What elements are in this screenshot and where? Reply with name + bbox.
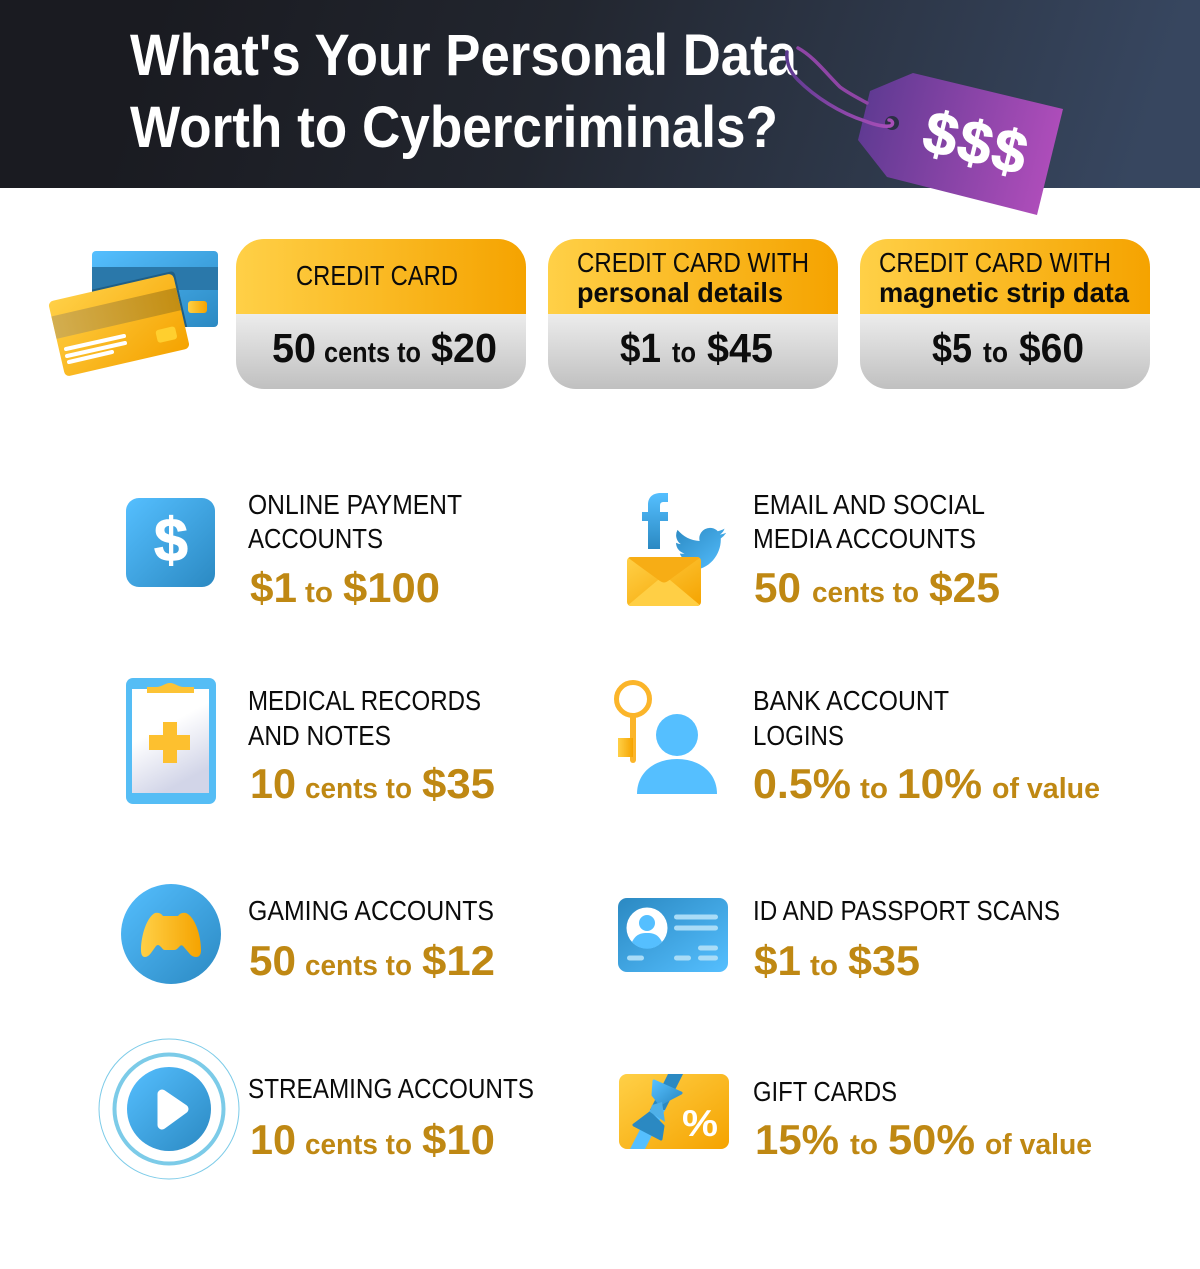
bank account logins: 0.5% [753,760,851,807]
icon: credit cards [48,251,218,377]
id and passport scans: ID AND PASSPORT SCANS [753,895,1060,926]
gift cards: to [850,1129,878,1161]
panel: credit card with personal details price: $45 [707,325,773,371]
icon: id card [618,898,728,972]
medical records and notes: $35 [422,760,495,807]
tag text: $$$ [917,98,1034,188]
email and social media accounts [753,489,1000,611]
email and social media accounts: 50 [754,564,801,611]
gift cards: GIFT CARDS [753,1076,897,1107]
panel: credit card with magnetic strip data price: CREDIT CARD WITH [879,247,1111,278]
medical records and notes [248,685,495,807]
gaming accounts: $12 [422,937,495,984]
streaming accounts: cents to [305,1129,412,1161]
icon: social and email [627,493,726,606]
icon: streaming play button [99,1039,239,1179]
icon: key and person [616,682,717,794]
icon: medical clipboard [126,678,216,804]
email and social media accounts: EMAIL AND SOCIAL [753,489,985,520]
panel: credit card with personal details price: $1 [620,325,661,371]
panel: credit card price: CREDIT CARD [296,260,458,291]
panel: credit card with personal details price: CREDIT CARD WITH [577,247,809,278]
medical records and notes: 10 [250,760,296,807]
icon: gift card: % [682,1103,718,1144]
bank account logins: BANK ACCOUNT [753,685,949,716]
medical records and notes: cents to [305,773,412,805]
icon: dollar app: $ [154,506,188,574]
bank account logins: of value [992,773,1100,805]
panel: credit card with magnetic strip data price [860,239,1150,389]
streaming accounts: STREAMING ACCOUNTS [248,1073,534,1104]
id and passport scans [753,895,1060,984]
panel: credit card with personal details price: personal details [577,277,783,308]
bank account logins: to [860,773,888,805]
online payment accounts: $1 [250,564,297,611]
medical records and notes: MEDICAL RECORDS [248,685,481,716]
online payment accounts: ACCOUNTS [248,523,383,554]
online payment accounts [248,489,462,611]
gaming accounts: cents to [305,950,412,982]
online payment accounts: $100 [343,564,440,611]
id and passport scans: $1 [754,937,801,984]
gift cards: of value [985,1129,1092,1161]
title: What's Your Personal Data [130,23,798,88]
header banner [0,0,1200,188]
id and passport scans: $35 [848,937,920,984]
streaming accounts [248,1073,534,1163]
panel: credit card price [236,239,526,389]
panel: credit card with personal details price [548,239,838,389]
gift cards: 50% [888,1116,975,1163]
panel: credit card with magnetic strip data price: $5 [932,325,972,371]
medical records and notes: AND NOTES [248,720,391,751]
title: Worth to Cybercriminals? [130,95,778,160]
gaming accounts [248,895,495,984]
email and social media accounts: MEDIA ACCOUNTS [753,523,976,554]
gaming accounts: 50 [249,937,296,984]
id and passport scans: to [810,950,838,982]
online payment accounts: to [305,577,333,609]
panel: credit card with personal details price: to [672,337,696,369]
icon: gift card [619,1074,729,1149]
email and social media accounts: $25 [929,564,1000,611]
gaming accounts: GAMING ACCOUNTS [248,895,494,926]
panel: credit card price: $20 [431,325,497,371]
bank account logins: LOGINS [753,720,844,751]
icon: game controller [121,884,221,984]
email and social media accounts: cents to [812,577,919,609]
bank account logins [753,685,1100,807]
streaming accounts: 10 [250,1116,296,1163]
streaming accounts: $10 [422,1116,495,1163]
panel: credit card with magnetic strip data price: to [983,337,1008,369]
panel: credit card price: 50 [272,325,316,371]
title [130,23,798,160]
panel: credit card with magnetic strip data price: magnetic strip data [879,277,1129,308]
bank account logins: 10% [897,760,982,807]
gift cards: 15% [755,1116,839,1163]
gift cards [753,1076,1092,1163]
icon: purple price tag [787,48,1063,215]
online payment accounts: ONLINE PAYMENT [248,489,462,520]
icon: dollar app [126,498,215,587]
panel: credit card with magnetic strip data price: $60 [1019,325,1084,371]
panel: credit card price: cents to [324,337,421,369]
